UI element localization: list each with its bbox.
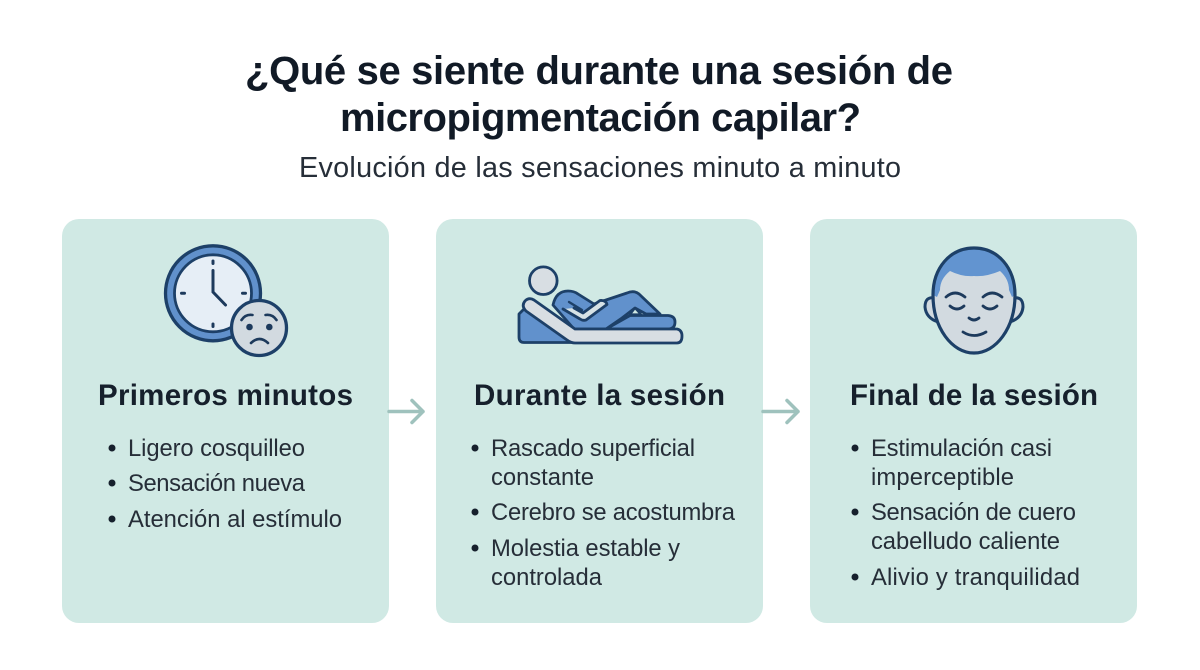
list: durante la sesion: controlada (491, 564, 603, 591)
list: final de la sesion: Estimulación casi (871, 435, 1052, 462)
panel: primeros minutos (62, 219, 389, 623)
title: ¿Qué se siente durante una sesión de (245, 49, 953, 93)
list: primeros minutos (108, 435, 342, 533)
icon: calm face (925, 248, 1023, 353)
list: final de la sesion: imperceptible (871, 464, 1014, 491)
icon: person reclining on a bed (519, 267, 682, 343)
list: final de la sesion: Sensación de cuero (871, 499, 1076, 526)
list: durante la sesion: Cerebro se acostumbra (491, 499, 736, 526)
arrow: second to third (763, 400, 798, 422)
title (245, 49, 953, 140)
icon: clock with worried face (166, 246, 286, 356)
heading: primeros minutos: Primeros minutos (98, 379, 353, 412)
list: primeros minutos: Sensación nueva (128, 470, 306, 497)
list: durante la sesion: constante (491, 464, 594, 491)
title: micropigmentación capilar? (340, 96, 861, 140)
subtitle: Evolución de las sensaciones minuto a minuto (299, 152, 901, 184)
list: durante la sesion: Rascado superficial (491, 435, 695, 462)
list: final de la sesion: cabelludo caliente (871, 528, 1060, 555)
list: final de la sesion: Alivio y tranquilidad (871, 564, 1080, 591)
heading: final de la sesion: Final de la sesión (850, 379, 1098, 412)
list: primeros minutos: Atención al estímulo (128, 506, 342, 533)
panel: durante la sesion (436, 219, 763, 623)
list: final de la sesion (852, 435, 1080, 591)
heading: durante la sesion: Durante la sesión (474, 379, 725, 412)
list: durante la sesion: Molestia estable y (491, 535, 680, 562)
list: primeros minutos: Ligero cosquilleo (128, 435, 305, 462)
list: durante la sesion (472, 435, 736, 591)
panel: final de la sesion (810, 219, 1137, 623)
arrow: first to second (389, 400, 423, 422)
